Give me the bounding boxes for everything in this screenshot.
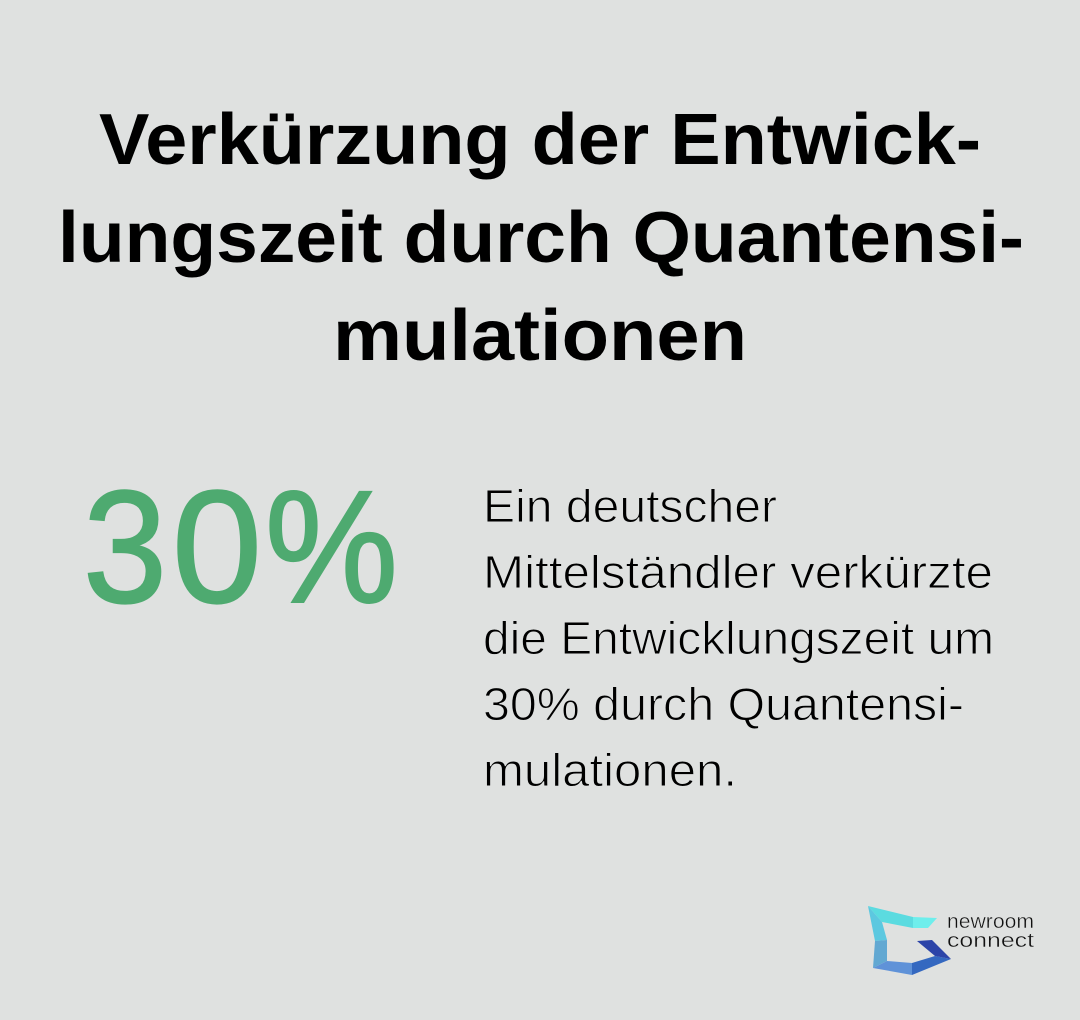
- icon: logo mark: [868, 906, 951, 975]
- description text: Ein deutscher: [483, 480, 777, 532]
- title: lungszeit durch Quantensi-: [58, 198, 1024, 278]
- logo wordmark: newroom: [947, 911, 1034, 933]
- big number: 30%: 3: [83, 457, 167, 636]
- title: mulationen: [333, 296, 747, 376]
- big number: 30%: %: [265, 457, 398, 636]
- title: [58, 100, 1024, 376]
- logo wordmark: [947, 911, 1035, 952]
- description text: 30% durch Quantensi-: [483, 678, 964, 730]
- description text: [483, 480, 994, 796]
- title: Verkürzung der Entwick-: [99, 100, 981, 180]
- big number: 30%: [83, 457, 398, 636]
- logo: newroom connect: [868, 906, 1035, 975]
- big number: 30%: 0: [172, 457, 262, 636]
- logo wordmark: connect: [947, 930, 1035, 952]
- description text: die Entwicklungszeit um: [483, 612, 994, 664]
- description text: Mittelständler verkürzte: [483, 546, 993, 598]
- description text: mulationen.: [483, 744, 737, 796]
